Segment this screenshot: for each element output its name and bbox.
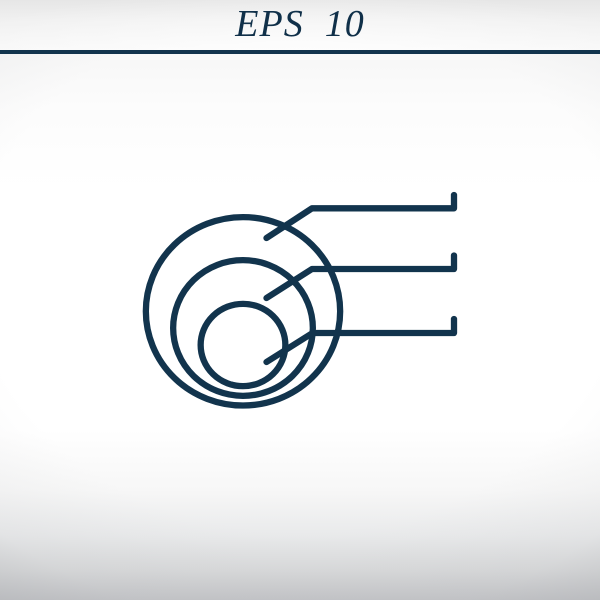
middle callout line <box>266 256 454 298</box>
top callout line <box>266 195 454 238</box>
header band <box>0 0 600 50</box>
middle circle <box>173 260 313 396</box>
outer circle <box>146 217 340 406</box>
bottom callout line <box>266 319 454 362</box>
inner circle <box>201 304 285 386</box>
header rule <box>0 50 600 54</box>
title: EPS 10 <box>235 2 365 44</box>
